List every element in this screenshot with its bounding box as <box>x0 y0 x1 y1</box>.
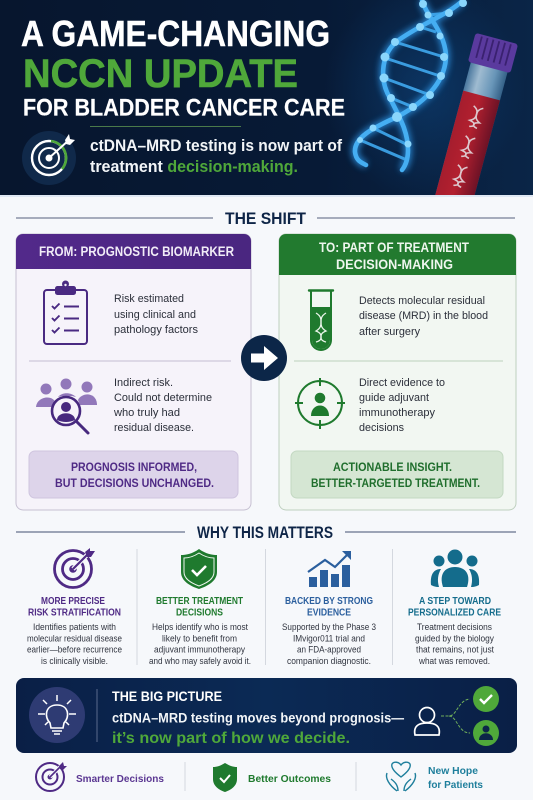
icon: clipboard checklist <box>44 280 87 344</box>
column: better treatment decisions: and who may safely avoid it. <box>149 656 251 666</box>
icon: target in hero <box>22 131 76 185</box>
text: risk estimated <box>114 293 198 336</box>
arrow: from to <box>241 335 287 381</box>
column: better treatment decisions: DECISIONS <box>176 608 223 618</box>
text: direct evidence <box>359 377 445 434</box>
column: better treatment decisions: Helps identify who is most <box>152 622 249 632</box>
panel: from prognostic biomarker <box>16 234 251 510</box>
panel: to treatment decision-making <box>279 234 516 510</box>
icon: rising bar chart <box>308 551 351 587</box>
column: a step toward personalized care: A STEP TOWARD <box>419 596 491 607</box>
column: more precise risk stratification: is clinically visible. <box>41 656 108 666</box>
panel header: to: TO: PART OF TREATMENT <box>319 240 470 255</box>
hero title: NCCN UPDATE <box>23 52 298 96</box>
column: more precise risk stratification: RISK STRATIFICATION <box>28 608 121 618</box>
text: detects MRD <box>359 295 488 338</box>
callout: actionable insight <box>291 451 503 498</box>
column: a step toward personalized care: that remains, not just <box>416 644 495 654</box>
text: detects MRD: after surgery <box>359 326 421 338</box>
text: indirect risk: residual disease. <box>114 422 194 434</box>
column: a step toward personalized care: Treatment decisions <box>417 622 493 632</box>
column: more precise risk stratification: MORE PRECISE <box>41 596 105 607</box>
callout: actionable insight: ACTIONABLE INSIGHT. <box>333 460 452 474</box>
icon: test tube with DNA <box>309 290 333 350</box>
column: backed by strong evidence: IMvigor011 trial and <box>293 634 365 644</box>
column: backed by strong evidence: BACKED BY STRONG <box>285 596 373 607</box>
column: backed by strong evidence: companion diagnostic. <box>287 656 371 666</box>
column: better treatment decisions: adjuvant immunotherapy <box>154 644 246 654</box>
big picture text <box>112 689 404 747</box>
column: a step toward personalized care: what was removed. <box>418 656 490 666</box>
footer item: better outcomes: Better Outcomes <box>248 773 331 785</box>
illustration: blood test tube <box>435 34 518 195</box>
column: backed by strong evidence <box>282 551 376 666</box>
icon: light bulb <box>29 687 85 743</box>
panel header: from <box>16 234 251 269</box>
text: indirect risk <box>113 377 212 434</box>
icon: person in crosshair <box>295 378 345 429</box>
text: detects MRD: disease (MRD) in the blood <box>359 310 488 322</box>
panel header: from: FROM: PROGNOSTIC BIOMARKER <box>39 244 234 259</box>
footer item: smarter decisions: Smarter Decisions <box>76 773 164 785</box>
hero subtitle: ctDNA–MRD testing is now part of <box>90 136 342 155</box>
panel: the big picture <box>16 678 517 753</box>
column: backed by strong evidence: an FDA-approved <box>297 644 361 654</box>
column: a step toward personalized care: PERSONALIZED CARE <box>408 608 501 618</box>
callout: prognosis informed <box>29 451 238 498</box>
hero title <box>21 13 345 122</box>
column: backed by strong evidence: EVIDENCE <box>307 608 351 618</box>
column: more precise risk stratification: molecular residual disease <box>27 634 122 644</box>
hero title: A GAME-CHANGING <box>21 13 330 54</box>
icon: people group <box>431 550 479 587</box>
column: more precise risk stratification: Identifies patients with <box>33 622 116 632</box>
hero subtitle: treatment decision-making. <box>90 157 298 176</box>
text: detects MRD: Detects molecular residual <box>359 295 485 307</box>
column: better treatment decisions <box>149 549 251 666</box>
callout: actionable insight: BETTER-TARGETED TREATMENT. <box>311 476 480 490</box>
section heading: the shift: THE SHIFT <box>225 209 307 228</box>
text: direct evidence: immunotherapy <box>359 407 436 419</box>
column: more precise risk stratification <box>27 548 122 666</box>
big picture text: it’s now part of how we decide. <box>112 730 350 747</box>
column: backed by strong evidence: Supported by the Phase 3 <box>282 622 376 632</box>
icon: group with magnifier <box>36 378 97 433</box>
text: indirect risk: Could not determine <box>114 392 212 404</box>
big picture text: ctDNA–MRD testing moves beyond prognosis— <box>112 710 404 726</box>
big picture text: THE BIG PICTURE <box>112 689 222 704</box>
panel header: to: DECISION-MAKING <box>336 257 453 272</box>
column: more precise risk stratification: earlier—before recurrence <box>27 644 122 654</box>
text: indirect risk: who truly had <box>113 407 180 419</box>
callout: prognosis informed: BUT DECISIONS UNCHANGED. <box>55 476 214 490</box>
icon: green shield <box>181 549 217 589</box>
column: a step toward personalized care <box>408 550 501 666</box>
text: indirect risk: Indirect risk. <box>114 377 173 389</box>
hero title: FOR BLADDER CANCER CARE <box>23 94 345 122</box>
column: better treatment decisions: likely to benefit from <box>162 634 237 644</box>
column: better treatment decisions: BETTER TREATMENT <box>156 596 244 607</box>
text: risk estimated: pathology factors <box>114 324 198 336</box>
footer item: new hope for patients: for Patients <box>428 779 483 791</box>
icon: purple target <box>54 548 95 588</box>
footer item: better outcomes <box>213 763 331 792</box>
text: risk estimated: Risk estimated <box>114 293 184 305</box>
text: direct evidence: decisions <box>359 422 404 434</box>
illustration: DNA helix <box>355 0 467 170</box>
panel header: to <box>279 234 516 275</box>
text: direct evidence: guide adjuvant <box>359 392 429 404</box>
text: direct evidence: Direct evidence to <box>359 377 445 389</box>
footer item: smarter decisions <box>36 762 164 791</box>
column: a step toward personalized care: guided by the biology <box>415 634 495 644</box>
footer item: new hope for patients: New Hope <box>428 765 478 777</box>
footer item: new hope for patients <box>386 762 483 791</box>
section heading: why this matters: WHY THIS MATTERS <box>197 524 333 542</box>
text: risk estimated: using clinical and <box>114 309 196 321</box>
hero subtitle <box>90 136 342 176</box>
icon: person with branching outcomes <box>415 686 499 746</box>
hero banner <box>0 0 533 197</box>
callout: prognosis informed: PROGNOSIS INFORMED, <box>71 460 197 474</box>
